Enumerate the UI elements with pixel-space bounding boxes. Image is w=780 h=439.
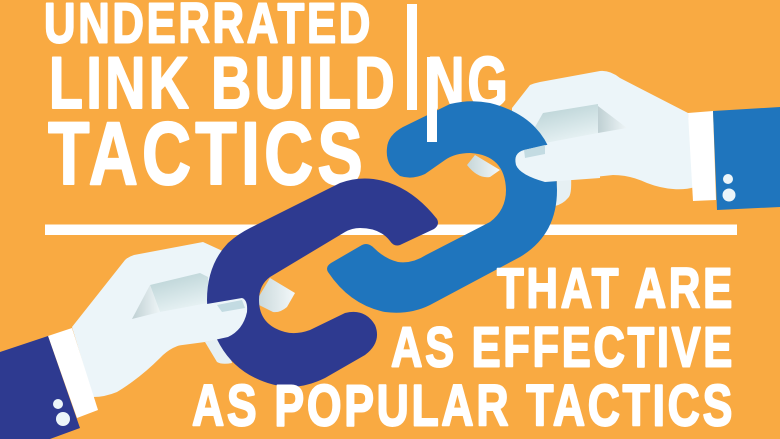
left hand front finger (160, 298, 247, 346)
chain link: dark navy (207, 178, 438, 387)
title: underrated link building tactics (44, 0, 511, 203)
right hand front finger (515, 133, 600, 182)
left sleeve buttons (53, 399, 70, 426)
left hand back: palm and fingertips behind the link (72, 242, 295, 397)
title: underrated link building tactics: TACTICS (48, 103, 367, 203)
subtitle: that are as effective as popular tactics (192, 256, 735, 438)
right hand back: palm and fingertips behind the link (467, 71, 695, 206)
left shirt cuff (48, 328, 98, 418)
title: underrated link building tactics: LINK BUILD (49, 43, 398, 124)
right sleeve buttons (722, 174, 736, 202)
tall letter stem: I of building (407, 4, 417, 110)
tall letter stem: N of building (427, 57, 437, 142)
left sleeve (0, 336, 80, 439)
right sleeve (713, 107, 780, 210)
title: underrated link building tactics: I (407, 43, 417, 124)
title: underrated link building tactics: NG (427, 43, 511, 124)
right shirt cuff (688, 111, 716, 201)
divider line (45, 224, 737, 235)
chain link: blue (327, 101, 557, 313)
